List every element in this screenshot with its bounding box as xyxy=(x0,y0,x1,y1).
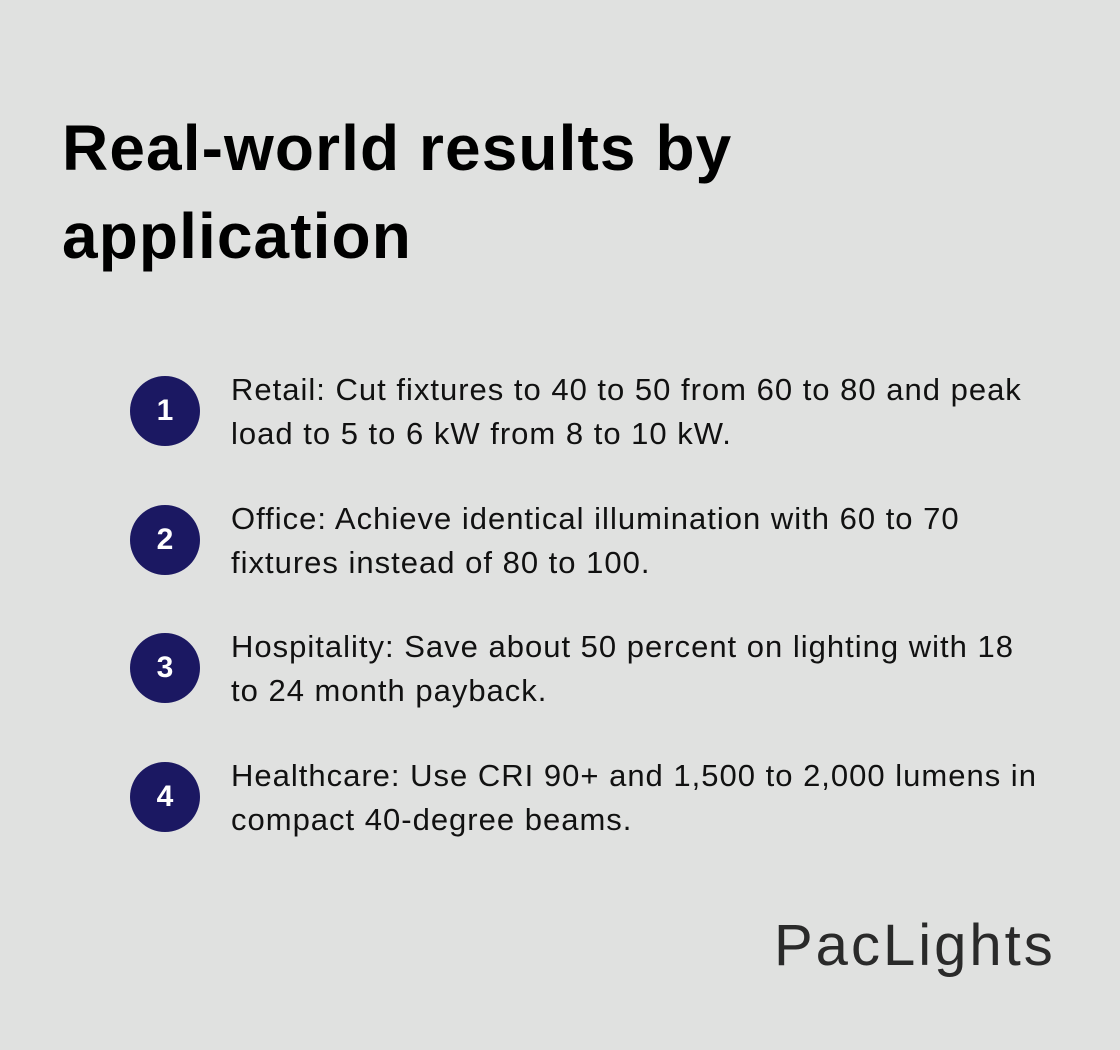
icon: number 3 xyxy=(130,633,200,703)
icon: number 1: 1 xyxy=(157,394,173,427)
icon: number 3: 3 xyxy=(157,651,173,684)
text 3 xyxy=(231,629,1014,708)
icon: number 4: 4 xyxy=(157,780,173,813)
item 1 xyxy=(130,372,1022,451)
logo: PacLights xyxy=(774,913,1056,978)
text 4: Healthcare: Use CRI 90+ and 1,500 to 2,000 lumens in xyxy=(231,758,1037,793)
text 1 xyxy=(231,372,1022,451)
text 2: fixtures instead of 80 to 100. xyxy=(231,545,650,580)
icon: number 2 xyxy=(130,505,200,575)
text 2: Office: Achieve identical illumination with 60 to 70 xyxy=(231,501,960,536)
text 4: compact 40-degree beams. xyxy=(231,802,632,837)
item 3 xyxy=(130,629,1014,708)
title: Real-world results by xyxy=(62,112,732,184)
icon: number 4 xyxy=(130,762,200,832)
item 2 xyxy=(130,501,960,580)
icon: number 1 xyxy=(130,376,200,446)
text 4 xyxy=(231,758,1037,837)
text 3: Hospitality: Save about 50 percent on lighting with 18 xyxy=(231,629,1014,664)
text 1: load to 5 to 6 kW from 8 to 10 kW. xyxy=(231,416,732,451)
item 4 xyxy=(130,758,1037,837)
title: application xyxy=(62,200,412,272)
text 1: Retail: Cut fixtures to 40 to 50 from 60 to 80 and peak xyxy=(231,372,1022,407)
text 3: to 24 month payback. xyxy=(231,673,547,708)
icon: number 2: 2 xyxy=(157,523,173,556)
title xyxy=(62,112,732,272)
text 2 xyxy=(231,501,960,580)
